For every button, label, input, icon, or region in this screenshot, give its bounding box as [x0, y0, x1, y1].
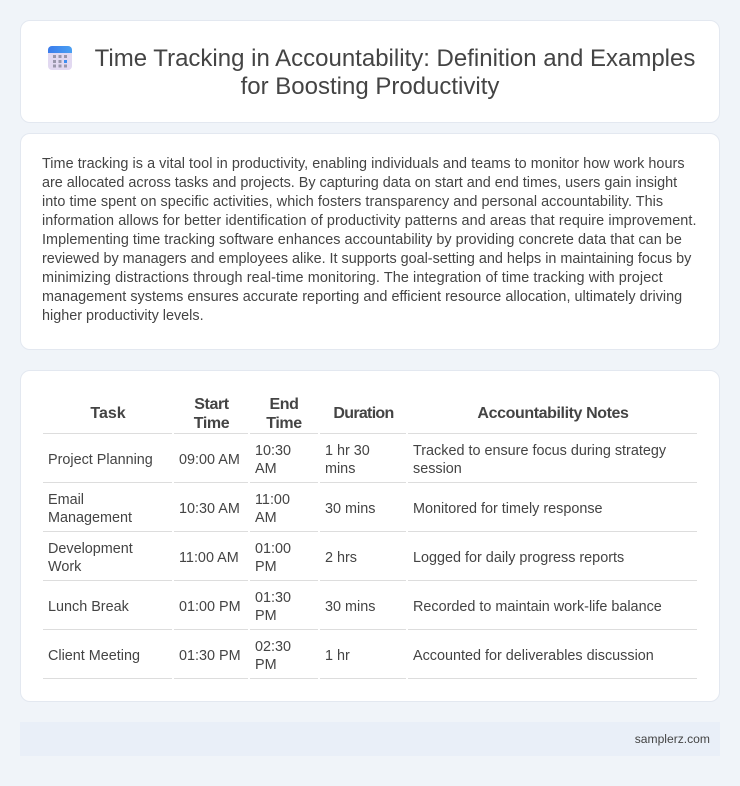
row: email management: 11:00 [255, 492, 290, 508]
panel: description: Time tracking is a vital tool in productivity, enabling individuals and teams to monitor how work hours [42, 156, 685, 172]
row: development work: 2 hrs [325, 550, 357, 566]
panel: description: minimizing distractions through real-time monitoring. The integration of time tracking with project [42, 270, 663, 286]
row: client meeting: PM [255, 657, 277, 673]
row: project planning: 1 hr 30 [325, 443, 370, 459]
row: lunch break: 30 mins [325, 599, 375, 615]
row: project planning: mins [325, 461, 355, 477]
panel: description: higher productivity levels. [42, 308, 204, 324]
row: project planning: 09:00 AM [179, 452, 240, 468]
panel: description: information allows for better identification of productivity patterns and areas that require improvement. [42, 213, 697, 229]
row: development work: Work [48, 559, 81, 575]
panel: time log table [20, 370, 720, 702]
row: client meeting: 1 hr [325, 648, 350, 664]
row: project planning: Project Planning [48, 452, 153, 468]
row: email management: Management [48, 510, 132, 526]
table header: Task [90, 405, 126, 422]
row: project planning [48, 443, 666, 477]
row: development work: 11:00 AM [179, 550, 239, 566]
table header: Duration [333, 405, 394, 422]
table header: Start [194, 396, 229, 413]
panel: description [20, 133, 720, 350]
row: development work: PM [255, 559, 277, 575]
table header: Time [266, 415, 302, 432]
panel: description: management systems ensures accurate reporting and efficient resource allocation, ultimately driving [42, 289, 682, 305]
row: development work: Development [48, 541, 133, 557]
row: lunch break: PM [255, 608, 277, 624]
row: client meeting: 01:30 PM [179, 648, 241, 664]
row: development work: 01:00 [255, 541, 291, 557]
row: client meeting [48, 639, 654, 673]
row: project planning: AM [255, 461, 277, 477]
title: for Boosting Productivity [241, 73, 499, 100]
table header: Accountability Notes [477, 405, 629, 422]
title: Time Tracking in Accountability: Definition and Examples [95, 45, 695, 72]
row: development work: Logged for daily progress reports [413, 550, 624, 566]
row: project planning: 10:30 [255, 443, 291, 459]
row: client meeting: Client Meeting [48, 648, 140, 664]
row: email management: 10:30 AM [179, 501, 240, 517]
table header: End [269, 396, 299, 413]
table header: Time [194, 415, 229, 432]
row: lunch break: 01:30 [255, 590, 291, 606]
row: client meeting: Accounted for deliverables discussion [413, 648, 654, 664]
row: email management [48, 492, 603, 526]
panel: description: into time spent on specific activities, which fosters transparency and personal accountability. This [42, 194, 663, 210]
title [95, 45, 695, 100]
row: email management: Email [48, 492, 84, 508]
panel: description: are allocated across tasks and projects. By capturing data on start and end times, users gain insight [42, 175, 677, 191]
row: project planning: session [413, 461, 462, 477]
footer source text: samplerz.com [635, 732, 710, 746]
row: lunch break: Recorded to maintain work-life balance [413, 599, 662, 615]
row: client meeting: 02:30 [255, 639, 291, 655]
icon: calendar [48, 46, 72, 70]
row: lunch break: Lunch Break [48, 599, 129, 615]
row: email management: 30 mins [325, 501, 375, 517]
row: lunch break [48, 590, 662, 624]
footer bar [20, 722, 720, 756]
row: development work [48, 541, 624, 575]
panel: description: Implementing time tracking software enhances accountability by providing concrete data that can be [42, 232, 682, 248]
row: email management: Monitored for timely response [413, 501, 603, 517]
panel: description: reviewed by managers and employees alike. It supports goal-setting and helps in maintaining focus by [42, 251, 691, 267]
row: email management: AM [255, 510, 277, 526]
table header [90, 396, 629, 432]
row: lunch break: 01:00 PM [179, 599, 241, 615]
header card [20, 20, 720, 123]
row: project planning: Tracked to ensure focus during strategy [413, 443, 666, 459]
